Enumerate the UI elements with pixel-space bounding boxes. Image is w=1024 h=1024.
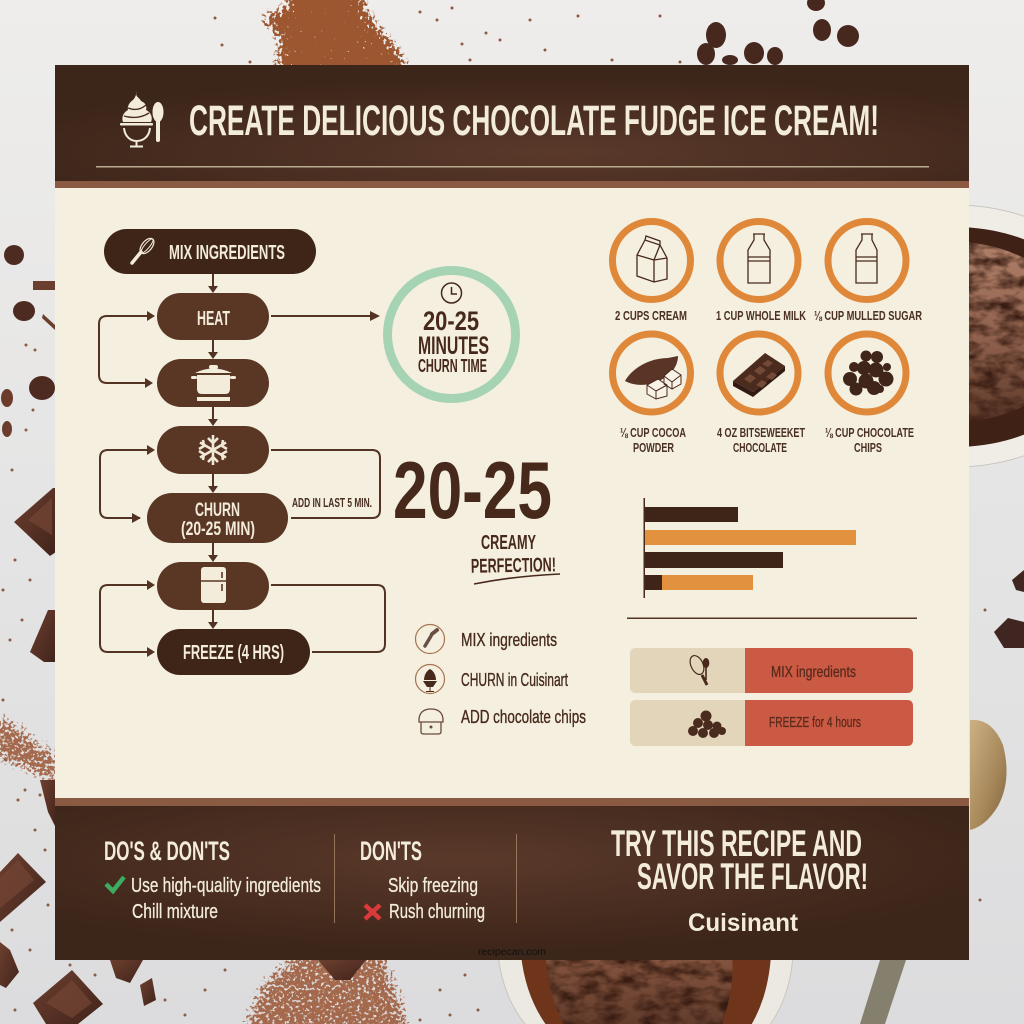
cocoa powder pile bottom [230, 945, 422, 1024]
action row: freeze [630, 700, 913, 746]
heading: do's and don'ts: DO'S & DON'TS [104, 836, 230, 866]
ingredient: chocolate bar [717, 334, 805, 455]
ingredient: cream: 2 CUPS CREAM [615, 308, 687, 323]
step: mix ingredients: MIX INGREDIENTS [169, 242, 285, 264]
list item: churn: CHURN in Cuisinart [461, 670, 568, 690]
step: mix ingredients [104, 229, 316, 274]
ice cream bowl bottom [498, 955, 793, 1024]
cocoa powder pile top [255, 0, 415, 80]
list item: add chips [419, 707, 586, 734]
ingredient: chocolate bar: 4 OZ BITSEWEEKET [717, 425, 805, 440]
list item: churn [416, 664, 568, 694]
step: heat: HEAT [197, 308, 230, 330]
ingredient: milk [716, 222, 806, 323]
action row: mix [630, 648, 913, 693]
list item: mix: MIX ingredients [461, 630, 557, 650]
step: heat [157, 293, 269, 340]
chocolate chips left [1, 245, 1024, 648]
step: pot icon [157, 359, 269, 407]
ingredient: chocolate chips: CHIPS [854, 440, 882, 455]
call to action: TRY THIS RECIPE AND [611, 823, 862, 864]
connector arrows [99, 274, 385, 652]
don't list [388, 875, 485, 923]
flowchart [99, 229, 385, 675]
icon: green check [106, 877, 124, 891]
ingredient: cream [612, 222, 690, 323]
call to action [611, 823, 868, 897]
steps list [416, 624, 586, 734]
panel: cream body [55, 188, 969, 798]
action row: freeze: FREEZE for 4 hours [769, 714, 861, 731]
do list: Chill mixture [132, 901, 218, 923]
ingredient icons [612, 222, 922, 455]
brand logo: Cuisinant [688, 909, 799, 937]
don't list: Skip freezing [388, 875, 478, 897]
do list [131, 875, 321, 923]
ingredient: chocolate chips [825, 334, 914, 455]
gold spoon [970, 720, 1007, 830]
ingredient: milk: 1 CUP WHOLE MILK [716, 308, 806, 323]
ingredient: cocoa [612, 334, 690, 455]
ingredient: chocolate bar: CHOCOLATE [733, 440, 787, 455]
callout: churn time circle: MINUTES [418, 332, 489, 360]
icon: red cross [365, 905, 380, 919]
don't list: Rush churning [389, 901, 485, 923]
arrowheads [132, 286, 380, 657]
ingredient: sugar [814, 222, 922, 323]
icon: ice cream sundae [120, 92, 164, 146]
step: churn: (20-25 MIN) [181, 519, 255, 540]
callout: churn time circle: CHURN TIME [418, 356, 487, 376]
step: freeze [157, 629, 310, 675]
callout: churn time circle [388, 270, 516, 398]
callout: churn time circle: 20-25 [423, 306, 479, 336]
chocolate chips top [697, 0, 859, 65]
do list: Use high-quality ingredients [131, 875, 321, 897]
source credit: recipecan.com [478, 947, 546, 958]
icon: whisk and spoon [687, 653, 709, 685]
ingredient: sugar: ⅛ CUP MULLED SUGAR [814, 308, 922, 323]
step: churn: CHURN [195, 500, 240, 521]
chocolate chunk bevels [0, 498, 92, 1018]
cocoa powder pile left [0, 708, 64, 795]
big number: 20-25 [393, 446, 552, 536]
tagline: creamy perfection [471, 532, 560, 584]
chocolate chunks [0, 488, 366, 1024]
icon: chips pile [688, 710, 726, 738]
ingredient: cocoa: ⅛ CUP COCOA [620, 425, 686, 440]
silver spoon handle [860, 960, 906, 1024]
ice cream bowl right [785, 205, 1024, 467]
panel: header band [55, 65, 969, 188]
ingredient: cocoa: POWDER [633, 440, 674, 455]
step: freeze snowflake [157, 426, 269, 474]
call to action: SAVOR THE FLAVOR! [637, 856, 868, 897]
list item: mix [416, 624, 557, 654]
icon: whisk [132, 236, 157, 263]
tagline: creamy perfection: CREAMY [481, 532, 536, 554]
panel: footer band [55, 798, 969, 960]
icon: clock [442, 283, 462, 303]
heading: don'ts: DON'TS [360, 836, 422, 866]
note: add in last 5 min: ADD IN LAST 5 MIN. [292, 495, 372, 510]
ingredient: chocolate chips: ⅛ CUP CHOCOLATE [825, 425, 914, 440]
action row: mix: MIX ingredients [771, 664, 856, 681]
tagline: creamy perfection: PERFECTION! [471, 554, 556, 578]
step: churn [147, 493, 288, 543]
step: fridge icon [157, 562, 269, 610]
bar chart [644, 498, 856, 598]
step: freeze: FREEZE (4 HRS) [183, 642, 284, 664]
list item: add chips: ADD chocolate chips [461, 707, 586, 727]
